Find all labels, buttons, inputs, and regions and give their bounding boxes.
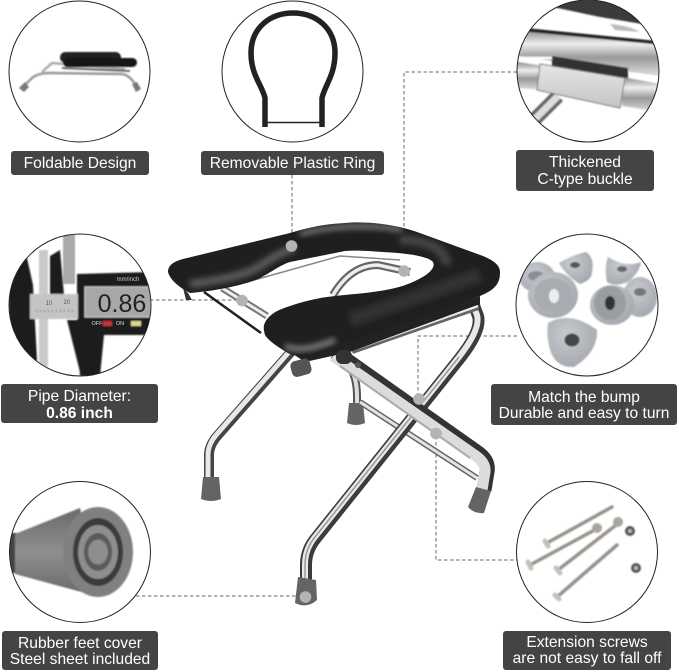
label: Match the bump: Match the bump (528, 389, 640, 406)
panel: removable plastic ring (201, 1, 384, 175)
photo: caliper: 20 (64, 300, 71, 306)
seat cushion (168, 222, 500, 356)
seat highlights (190, 227, 480, 349)
rubber feet (201, 477, 491, 605)
label: Extension screws (503, 631, 671, 670)
panel: pipe diameter (1, 234, 158, 423)
label: Rubber feet cover: Rubber feet cover (18, 635, 142, 652)
seat frame bars (204, 256, 480, 362)
left leg (208, 344, 297, 478)
label: Match the bump (491, 384, 677, 425)
label: Extension screws: are not easy to fall off (513, 650, 662, 667)
circle outline (10, 482, 150, 622)
label: Pipe Diameter 0.86 inch: 0.86 inch (46, 405, 113, 422)
photo: caliper: 0.86 (98, 290, 146, 318)
cross rod (360, 402, 477, 478)
label: Removable Plastic Ring (201, 151, 384, 175)
label: Rubber feet cover: Steel sheet included (10, 651, 150, 668)
panel: foldable design (9, 1, 150, 175)
photo: caliper (9, 234, 151, 385)
label: Pipe Diameter 0.86 inch: Pipe Diameter: (28, 388, 131, 405)
label: Rubber feet cover (2, 631, 158, 670)
pivot pins (289, 350, 361, 378)
photo: buckle on tube (518, 0, 658, 124)
circle outline (517, 0, 659, 142)
long front leg (305, 300, 479, 583)
seat arm end (183, 288, 192, 300)
callout dots (236, 240, 442, 603)
leader lines (136, 72, 517, 596)
circle outline (516, 234, 658, 376)
back leg (345, 362, 365, 425)
panel: extension screws (503, 482, 671, 670)
label: Foldable Design: Foldable Design (24, 155, 136, 172)
circle outline (9, 234, 151, 376)
label: Extension screws: Extension screws (526, 634, 648, 651)
label: Thickened C-type buckle: C-type buckle (537, 171, 633, 188)
label: Thickened C-type buckle: Thickened (549, 154, 621, 171)
label: Pipe Diameter 0.86 inch (1, 384, 158, 423)
photo: caliper: OFF (92, 321, 103, 327)
hoop behind seat (333, 265, 410, 295)
panel: c-type buckle (516, 0, 660, 191)
photo: caliper: 10 (46, 301, 53, 307)
icon: plastic ring (222, 1, 363, 142)
label: Removable Plastic Ring: Removable Plastic Ring (210, 155, 375, 172)
panel: match the bump (491, 234, 677, 425)
icon: folded chair (9, 1, 150, 142)
photo: caliper: mm/inch (117, 277, 139, 283)
right diagonal leg (333, 352, 487, 490)
panel: rubber feet cover (2, 482, 158, 670)
label: Match the bump: Durable and easy to turn (499, 405, 669, 422)
label: Foldable Design (11, 151, 149, 175)
photo: rubber foot (9, 507, 133, 597)
photo: screws and nuts (516, 482, 658, 622)
photo: rubber bumps (519, 252, 657, 367)
label: Thickened C-type buckle (516, 150, 654, 191)
chair (168, 222, 500, 605)
photo: caliper: ON (116, 321, 124, 327)
